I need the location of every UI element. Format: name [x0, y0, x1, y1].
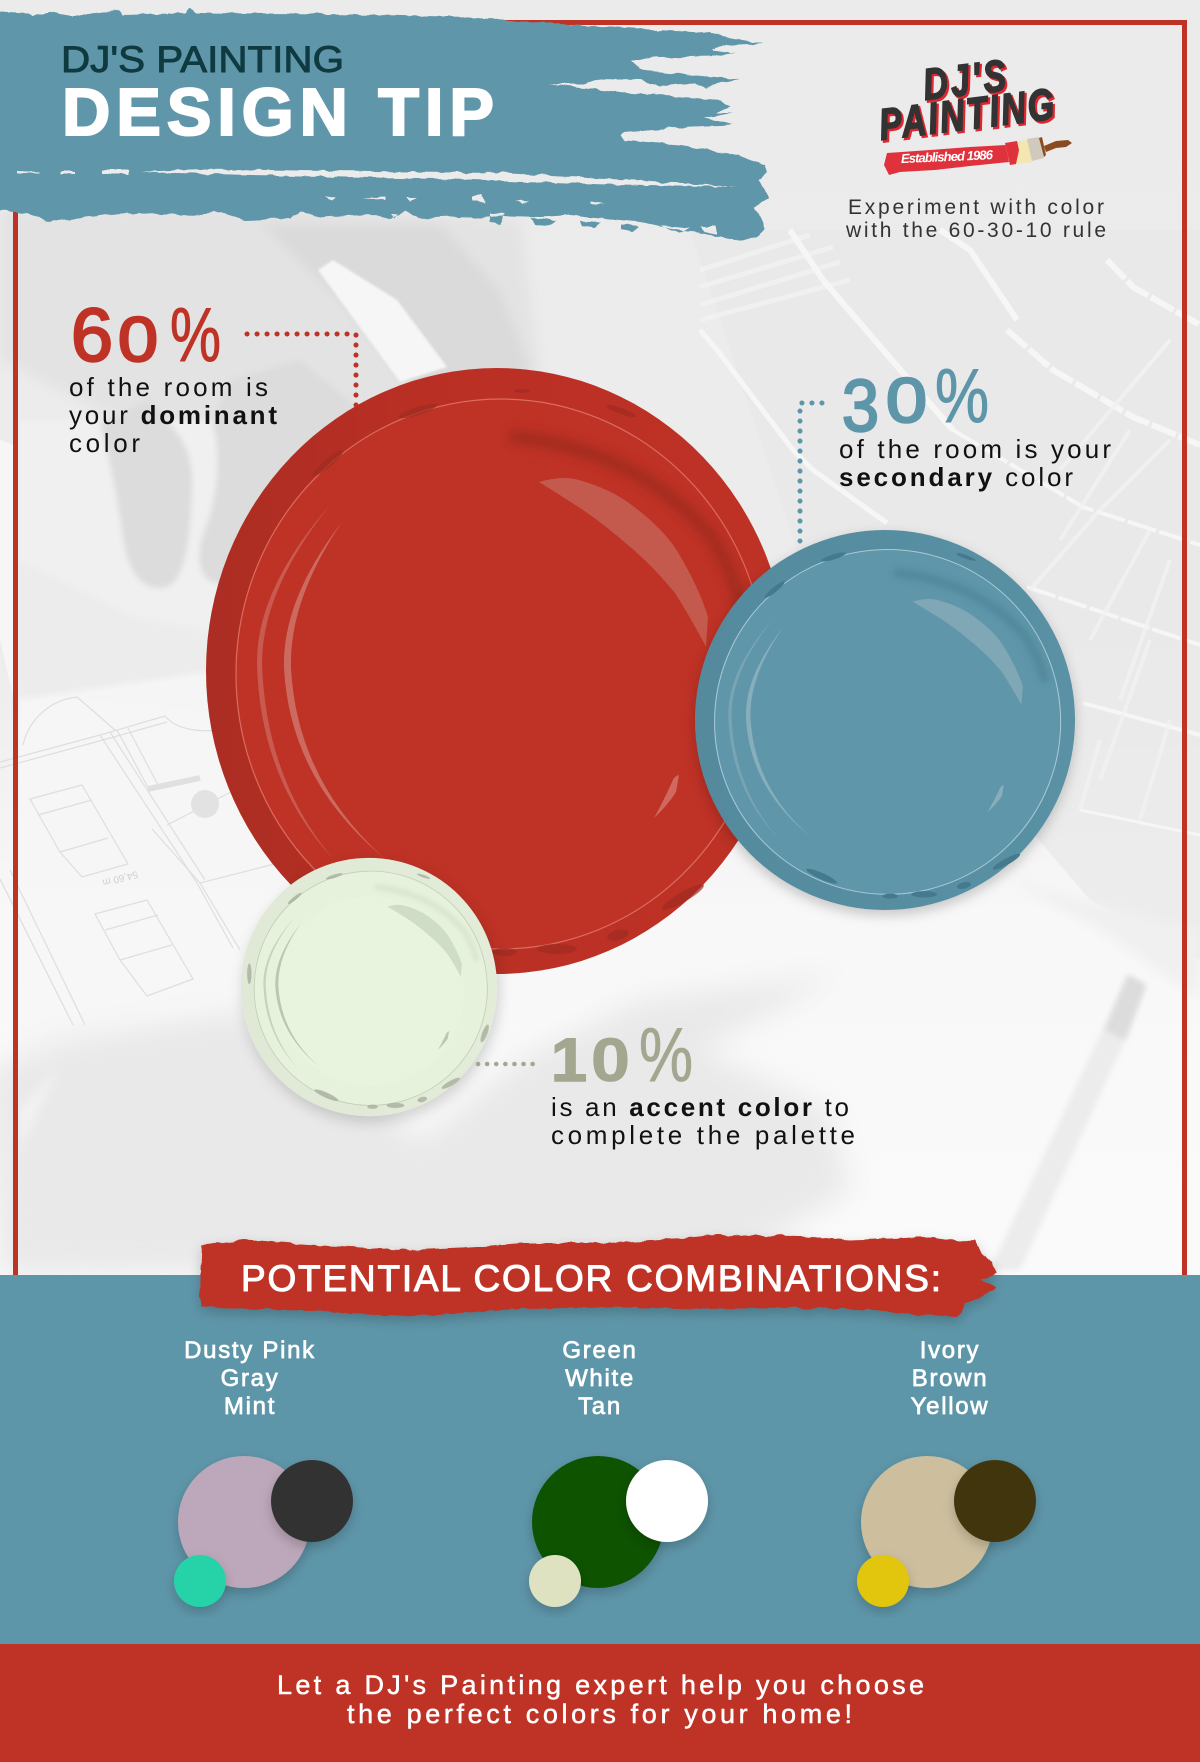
blue plate: 30%: [695, 530, 1075, 910]
combo 2 label: Tan: [578, 1393, 622, 1420]
combo 3 swatches: [857, 1456, 1036, 1607]
60% number: [71, 293, 221, 378]
red plate: 60%: [206, 368, 788, 974]
banner title: POTENTIAL COLOR COMBINATIONS:: [241, 1258, 941, 1299]
10% description: complete the palette: [551, 1120, 855, 1150]
callout 10%: [478, 1013, 855, 1150]
30% number: [842, 354, 989, 447]
30% description: of the room is your: [839, 434, 1111, 464]
banner brush stroke: [200, 1235, 997, 1317]
10% description: is an accent color to: [551, 1092, 849, 1122]
finger 1: [100, 400, 192, 588]
footer call to action: the perfect colors for your home!: [347, 1699, 852, 1729]
white paper strip: [318, 260, 447, 382]
decorative frame: [16, 22, 1184, 1280]
30% description: [839, 434, 1111, 492]
floor plan dimension label: 54,60 m: [101, 868, 139, 888]
60% number: 0: [118, 305, 158, 375]
top left sleeve tone: [0, 205, 540, 470]
logo: paint brush: [1005, 137, 1072, 165]
combo 1 swatches: [174, 1456, 353, 1607]
logo: [876, 51, 1072, 175]
heading: DJ'S PAINTING: DJ'S PAINTING: [61, 39, 344, 80]
combo 2 swatches: [529, 1456, 708, 1607]
footer call to action: Let a DJ's Painting expert help you choose: [277, 1670, 924, 1700]
intro text: [845, 196, 1106, 242]
60% description: color: [69, 428, 140, 458]
logo: wordmark: PAINTING: [876, 80, 1057, 150]
combo 1 label: Mint: [224, 1393, 276, 1420]
combo 1 label: Gray: [221, 1365, 279, 1392]
background photo: hands, swatches and floor plan: [0, 0, 1200, 1280]
header brush stroke: [0, 9, 768, 240]
finger 2: [199, 360, 360, 583]
intro text: with the 60-30-10 rule: [845, 219, 1106, 242]
logo: established: Established 1986: [901, 147, 994, 166]
60% description: of the room is: [69, 372, 268, 402]
logo: wordmark: DJ'S: [920, 51, 1009, 110]
callout 60%: [69, 293, 356, 458]
combo 3 label: [911, 1337, 989, 1420]
10% number: 0: [591, 1026, 630, 1094]
left hand shadow: [0, 975, 850, 1275]
combination 3: [857, 1337, 1036, 1607]
combo 1 label: [184, 1337, 316, 1420]
dotted connector gray: [478, 1062, 538, 1066]
10% number: [551, 1013, 693, 1098]
footer call to action: [0, 1644, 1200, 1762]
heading: DESIGN TIP: DESIGN TIP: [62, 75, 494, 150]
60% description: [69, 372, 277, 458]
paper under fingers: [18, 420, 300, 640]
logo: wordmark: PAINTING: [878, 82, 1059, 152]
combo 2 label: White: [565, 1365, 635, 1392]
30% number: %: [935, 354, 989, 439]
30% description: secondary color: [839, 462, 1073, 492]
floor plan lines: [0, 697, 290, 1025]
combination 1: [174, 1337, 353, 1607]
floor plan paper: [18, 600, 700, 1060]
logo: wordmark: [876, 51, 1059, 152]
mint plate: 10%: [241, 858, 497, 1116]
blurred pen: [990, 975, 1146, 1270]
30% number: 0: [886, 366, 927, 436]
logo: red paint stroke: [884, 145, 1009, 175]
combo 2 label: Green: [562, 1337, 638, 1364]
darker hand back: [262, 225, 530, 400]
panel: color combinations: [0, 1235, 1200, 1645]
callout 30%: [800, 354, 1111, 541]
60% description: your dominant: [69, 400, 277, 430]
combo 1 label: Dusty Pink: [184, 1337, 316, 1364]
dotted connector blue: [800, 403, 822, 541]
60% number: 6: [71, 293, 113, 377]
30% number: 3: [842, 366, 879, 447]
combo 2 label: [562, 1337, 638, 1420]
combo 3 label: Brown: [912, 1365, 988, 1392]
dotted connector red: [247, 334, 356, 405]
10% number: %: [639, 1013, 693, 1098]
combo 3 label: Yellow: [911, 1393, 989, 1420]
10% description: [551, 1092, 855, 1150]
10% number: 1: [551, 1026, 587, 1094]
intro text: Experiment with color: [848, 196, 1104, 219]
60% number: %: [170, 293, 221, 378]
swatch fan base: [690, 230, 1200, 960]
combo 3 label: Ivory: [920, 1337, 980, 1364]
logo: wordmark: DJ'S: [922, 53, 1011, 112]
combination 2: [529, 1337, 708, 1607]
